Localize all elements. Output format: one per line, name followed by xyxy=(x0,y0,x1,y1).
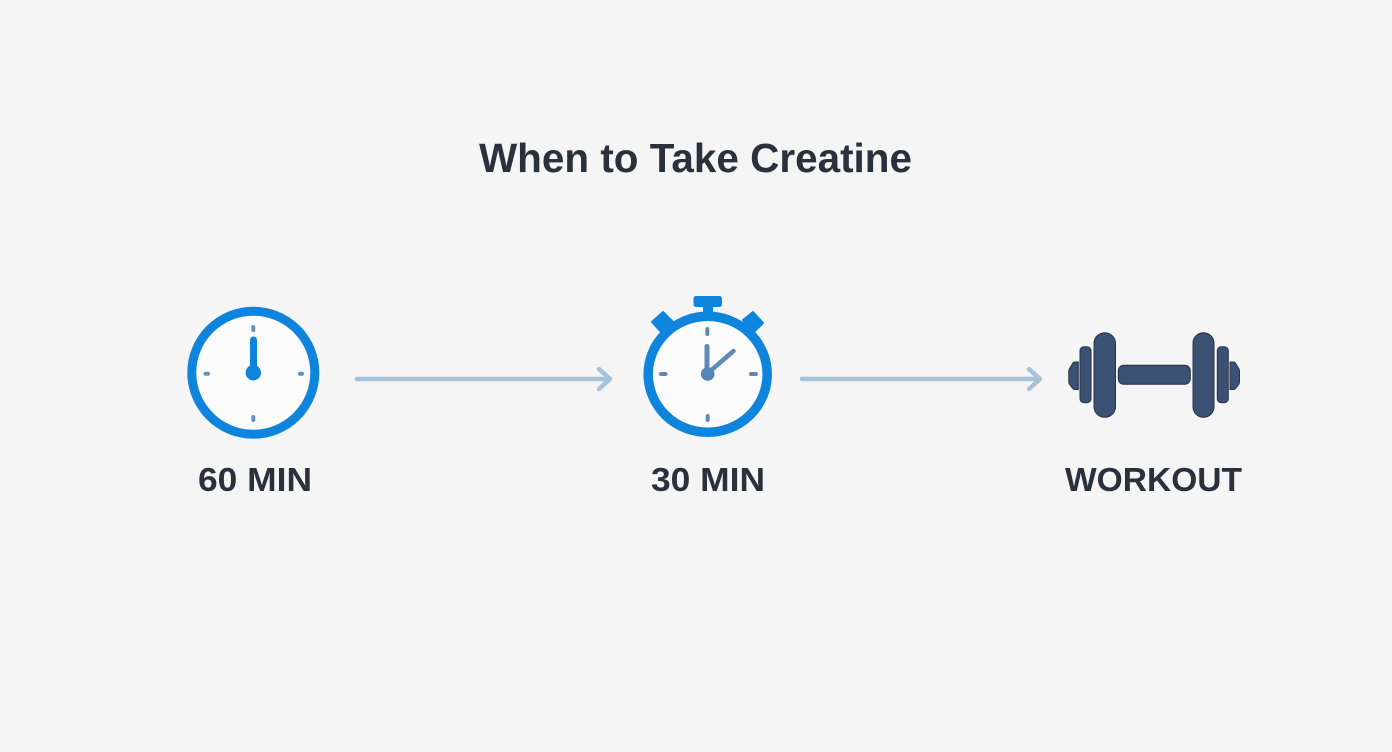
label: 30 MIN: 30 MIN xyxy=(651,461,765,498)
title: When to Take Creatine xyxy=(479,135,912,181)
arrow: 60 min to 30 min xyxy=(357,369,610,389)
icon: stopwatch at 30 minutes xyxy=(648,296,767,432)
label: 60 MIN: 60 MIN xyxy=(198,461,312,498)
label: WORKOUT: WORKOUT xyxy=(1065,461,1242,498)
arrow: 30 min to workout xyxy=(802,369,1040,389)
icon: dumbbell xyxy=(1069,333,1240,417)
icon: clock at 60 minutes xyxy=(192,311,315,434)
